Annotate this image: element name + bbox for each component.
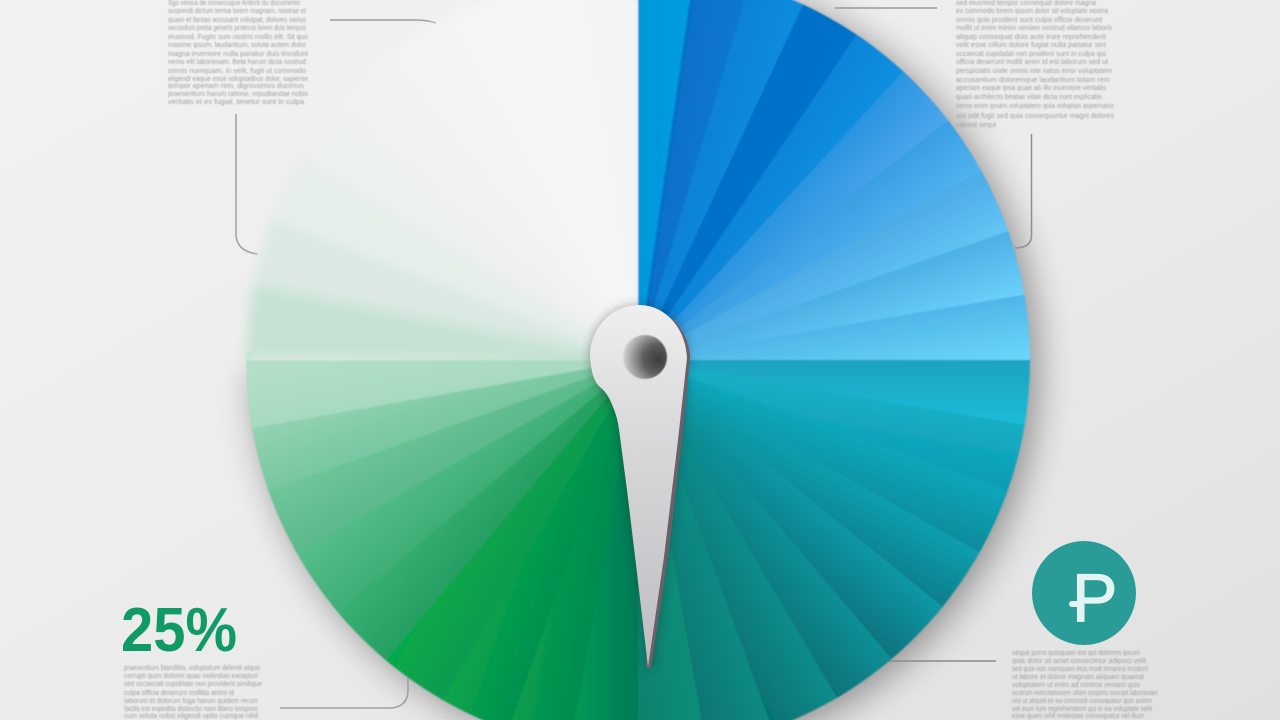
- text block: bottom right: nisi ut aliquid ex ea commodi consequatur quis autem: [1012, 698, 1152, 705]
- connector line: bottom right: [888, 660, 996, 662]
- text block: bottom right: sed quia non numquam eius modi tempora incidunt: [1012, 666, 1148, 673]
- text block: bottom left: laborum et dolorum fuga harum quidem rerum: [124, 698, 258, 705]
- fan quadrant: light green to green lower left: [239, 286, 638, 720]
- text block: bottom right: [1012, 650, 1158, 720]
- text block: top right: officia deserunt mollit anim id est laborum sed ut: [956, 59, 1108, 66]
- text block: bottom right: quia dolor sit amet consectetur adipisci velit: [1012, 658, 1146, 665]
- text block: top right: velit esse cillum dolore fugiat nulla pariatur sint: [956, 42, 1106, 49]
- text block: top right: [956, 0, 1115, 129]
- text block: top left: omnis numquam, in velit, fugit ut commodo: [168, 68, 306, 75]
- text block: top right: mollit ut enim minim veniam nostrud ullamco laboris: [956, 25, 1112, 32]
- text block: top right: sed eiusmod tempor consequat dolore magna: [956, 0, 1096, 7]
- text block: bottom right: vel eum iure reprehenderit qui in ea voluptate velit: [1012, 706, 1152, 713]
- text block: top left: veritatis et ex fugiat, tenetur sunt in culpa: [168, 99, 304, 106]
- text block: top left: secundum pretia generis proterus lorem duis tempus: [168, 25, 306, 32]
- text block: bottom right: esse quam nihil molestiae consequatur vel illum: [1012, 713, 1144, 720]
- text block: top left: praesentium harum ratione, repudiandae nobis: [168, 91, 308, 98]
- needle dark edge: [646, 318, 690, 668]
- text block: top left: Sgo veioca de consecuque Anteck du documento: [168, 0, 300, 7]
- text block: top right: aliquip consequat duis aute irure reprehenderit: [956, 34, 1106, 41]
- text block: top left: magna inventore nulla pariatur duis tincidunt: [168, 51, 308, 58]
- text block: top right: aut odit fugit sed quia consequuntur magni dolores: [956, 113, 1115, 120]
- text block: top right: occaecat cupidatat non proident sunt in culpa qui: [956, 51, 1106, 58]
- text block: top right: quasi architecto beatae vitae dicta sunt explicabo: [956, 94, 1102, 101]
- needle pointer: [589, 305, 690, 668]
- fan quadrant: blue upper right: [638, 0, 1037, 434]
- text block: top left: [168, 0, 308, 106]
- fan quadrant: faded upper left: [242, 0, 640, 361]
- text block: bottom left: praesentium blanditiis, voluptatum deleniti atque: [124, 665, 260, 672]
- text block: top left: eligendi eaque esse voluptatibus dolor, sapiente: [168, 76, 308, 83]
- wheel drop shadow: [254, 0, 1038, 720]
- fan wheel: [239, 0, 1037, 720]
- text block: bottom left: sint occaecati cupiditate non provident similique: [124, 681, 262, 688]
- connector line: left bracket: [236, 114, 258, 254]
- text block: top right: perspiciatis unde omnis iste natus error voluptatem: [956, 68, 1112, 75]
- text block: top left: maxime ipsum, laudantium, soluta autem dolor: [168, 42, 307, 49]
- text block: bottom left: corrupti quos dolores quas molestias excepturi: [124, 673, 258, 680]
- text block: top left: quam et fantas accusant volutpat, dolores varius: [168, 17, 306, 24]
- connector line: bottom left: [280, 672, 408, 708]
- connector line: top left horizontal: [330, 20, 436, 23]
- text block: bottom right: ut labore et dolore magnam aliquam quaerat: [1012, 674, 1144, 681]
- text block: bottom right: neque porro quisquam est qui dolorem ipsum: [1012, 650, 1140, 657]
- connector line: top right: [835, 7, 937, 9]
- text block: bottom left: culpa officia deserunt mollitia animi id: [124, 690, 234, 697]
- ruble symbol: P: [1072, 560, 1117, 636]
- connector line: right bracket: [1015, 134, 1032, 248]
- text block: top right: aperiam eaque ipsa quae ab illo inventore veritatis: [956, 85, 1106, 92]
- text block: bottom right: nostrum exercitationem ullam corporis suscipit laboriosam: [1012, 690, 1158, 697]
- text block: bottom left: facilis est expedita distinctio nam libero tempore: [124, 706, 258, 713]
- text block: top left: eiusmod. Fugits sum nostris mollis elit. Sit quo: [168, 34, 308, 41]
- icon: ruble coin: [1032, 541, 1136, 645]
- text block: top right: ex commodo lorem ipsum dolor sit voluptate nostra: [956, 8, 1108, 15]
- text block: top left: tempor aperiam rem, dignissimos ducimus: [168, 83, 305, 90]
- text block: bottom left: cum soluta nobis eligendi optio cumque nihil: [124, 713, 258, 720]
- text block: bottom left: [124, 665, 262, 720]
- needle pivot ball: [623, 335, 667, 379]
- statistic: 25%: 25%: [121, 596, 237, 665]
- text block: top left: suspendi dictum terma lorem magnam, nostrae et: [168, 8, 306, 15]
- text block: top right: nemo enim ipsam voluptatem quia voluptas aspernatur: [956, 103, 1115, 110]
- text block: top right: ratione sequi: [956, 122, 996, 129]
- fan quadrant: teal lower right: [564, 360, 1030, 720]
- needle shadow: [589, 305, 689, 668]
- text block: bottom right: voluptatem ut enim ad minima veniam quis: [1012, 682, 1140, 689]
- text block: top left: nemo elit laboriosam. Beta harum dicta nostrud: [168, 59, 306, 66]
- needle face: [590, 305, 687, 667]
- text block: top right: omnis quis proident sunt culpa officia deserunt: [956, 17, 1102, 24]
- text block: top right: accusantium doloremque laudantium totam rem: [956, 77, 1110, 84]
